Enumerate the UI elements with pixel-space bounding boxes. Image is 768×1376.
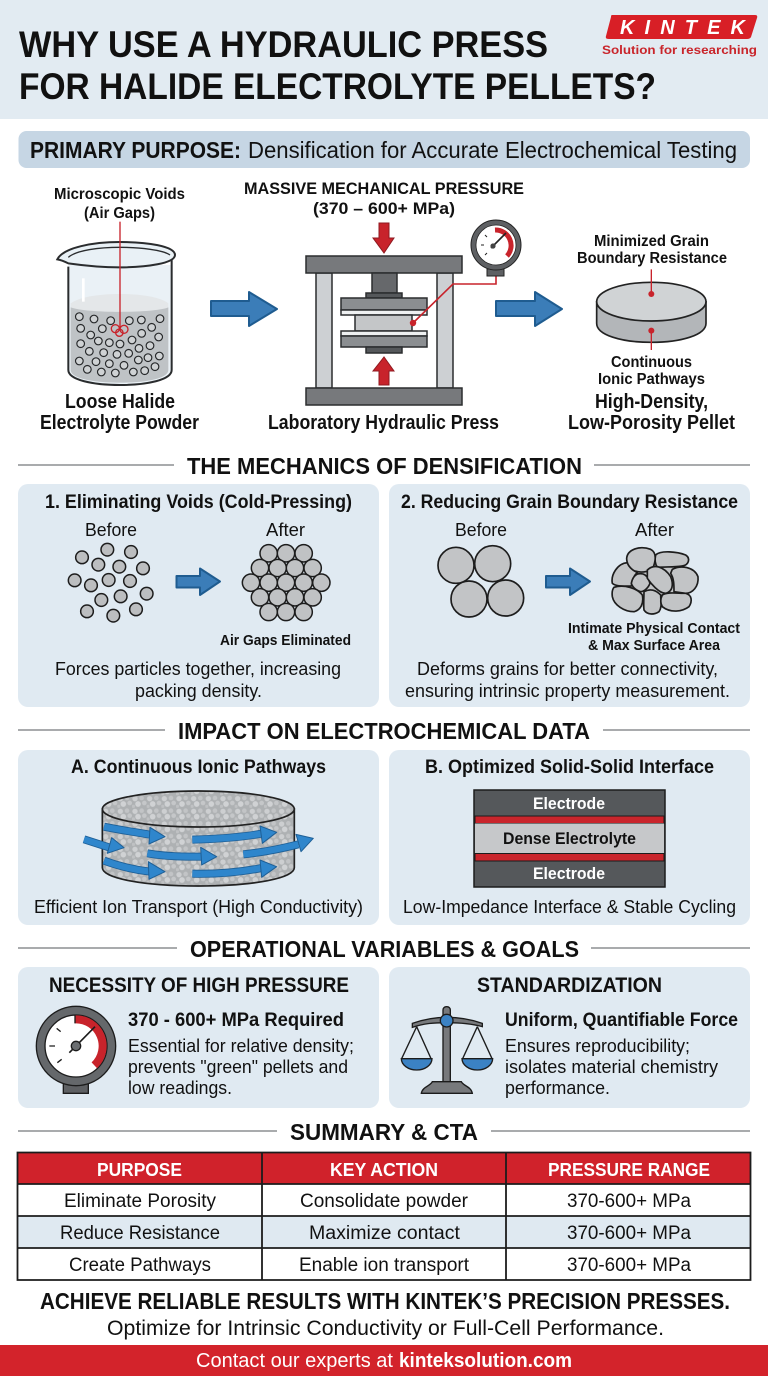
label: continuous ionic pathways: Continuous bbox=[611, 354, 692, 371]
label: continuous ionic pathways: Ionic Pathways bbox=[598, 371, 705, 388]
panel: reducing grain boundary resistance bbox=[389, 484, 750, 707]
label: microscopic voids: (Air Gaps) bbox=[84, 205, 155, 222]
description: Low-Impedance Interface & Stable Cycling bbox=[403, 897, 736, 917]
logo: Kintek bbox=[602, 15, 757, 57]
label: microscopic voids bbox=[54, 186, 185, 222]
table row 2: Maximize contact bbox=[309, 1223, 461, 1244]
label: massive mechanical pressure: (370 – 600+ MPa) bbox=[313, 199, 455, 218]
panel: pellet bbox=[568, 233, 735, 434]
label: after: After bbox=[635, 520, 674, 540]
diagram: deformed grains bbox=[612, 548, 698, 614]
footer contact bar: Contact our experts at bbox=[196, 1350, 393, 1372]
label: high density pellet: High-Density, bbox=[595, 391, 708, 413]
label: dense electrolyte: Dense Electrolyte bbox=[503, 829, 636, 848]
description: prevents "green" pellets and bbox=[128, 1057, 348, 1077]
label: intimate physical contact: & Max Surface Area bbox=[588, 638, 721, 654]
table header: PURPOSE bbox=[97, 1159, 182, 1180]
diagram: packed particles bbox=[242, 545, 330, 621]
panel heading: 2. Reducing Grain Boundary Resistance bbox=[401, 492, 738, 513]
label: high density pellet: Low-Porosity Pellet bbox=[568, 412, 735, 434]
table header: PRESSURE RANGE bbox=[548, 1159, 710, 1180]
logo: Kintek: KINTEK bbox=[620, 17, 747, 39]
panel: hydraulic press bbox=[244, 179, 524, 405]
panel: necessity of high pressure bbox=[18, 967, 379, 1108]
icon: balance scales bbox=[401, 1007, 493, 1093]
label: minimized grain boundary resistance: Minimized Grain bbox=[594, 233, 709, 250]
table row 3: Enable ion transport bbox=[299, 1255, 470, 1276]
callout: pressure required: 370 - 600+ MPa Required bbox=[128, 1009, 344, 1031]
header band bbox=[0, 0, 768, 119]
call to action: Optimize for Intrinsic Conductivity or Full-Cell Performance. bbox=[107, 1317, 664, 1340]
panel heading: B. Optimized Solid-Solid Interface bbox=[425, 757, 714, 778]
label: minimized grain boundary resistance: Boundary Resistance bbox=[577, 250, 727, 267]
description: Ensures reproducibility; bbox=[505, 1036, 690, 1056]
arrow: pressing up bbox=[373, 357, 394, 385]
description: packing density. bbox=[135, 681, 262, 701]
logo: Kintek: Solution for researching bbox=[602, 45, 757, 57]
arrow bbox=[546, 568, 590, 595]
description bbox=[505, 1036, 718, 1098]
callout: uniform force: Uniform, Quantifiable Force bbox=[505, 1009, 738, 1031]
table row 1: 370-600+ MPa bbox=[567, 1191, 691, 1212]
label: high density pellet bbox=[568, 391, 735, 434]
icon: small pressure gauge bbox=[471, 220, 521, 276]
table row 1: Consolidate powder bbox=[300, 1191, 469, 1212]
description: Forces particles together, increasing bbox=[55, 659, 341, 679]
description bbox=[55, 659, 341, 701]
table header bbox=[97, 1159, 710, 1180]
table row 1 bbox=[64, 1191, 691, 1212]
footer contact bar: kinteksolution.com bbox=[399, 1350, 572, 1372]
label: loose halide powder bbox=[40, 391, 199, 434]
diagram: loose particles bbox=[68, 543, 153, 622]
icon: pressure gauge bbox=[36, 1006, 116, 1093]
table row 2: 370-600+ MPa bbox=[567, 1223, 691, 1244]
label: continuous ionic pathways bbox=[598, 354, 705, 388]
panel: standardization bbox=[389, 967, 750, 1108]
panel heading: STANDARDIZATION bbox=[477, 974, 662, 997]
heading: impact on electrochemical data: IMPACT ON ELECTROCHEMICAL DATA bbox=[178, 718, 590, 744]
label: microscopic voids: Microscopic Voids bbox=[54, 186, 185, 203]
label: after: After bbox=[266, 520, 305, 540]
description: Deforms grains for better connectivity, bbox=[417, 659, 718, 679]
table row 3: 370-600+ MPa bbox=[567, 1255, 691, 1276]
primary purpose banner bbox=[18, 131, 750, 168]
label: intimate physical contact: Intimate Physical Contact bbox=[568, 621, 740, 637]
icon: beaker with powder bbox=[57, 222, 175, 385]
panel: optimized solid-solid interface bbox=[389, 750, 750, 925]
description: isolates material chemistry bbox=[505, 1057, 718, 1077]
icon: press frame bbox=[306, 256, 462, 405]
label: massive mechanical pressure bbox=[244, 179, 524, 218]
label: before: Before bbox=[455, 520, 507, 540]
gauge connector line bbox=[413, 276, 496, 323]
label: top electrode: Electrode bbox=[533, 794, 605, 813]
heading: mechanics of densification: THE MECHANICS OF DENSIFICATION bbox=[187, 453, 582, 479]
table row 2: Reduce Resistance bbox=[60, 1223, 220, 1244]
heading: summary and cta: SUMMARY & CTA bbox=[290, 1119, 478, 1145]
call to action bbox=[40, 1288, 730, 1340]
label: intimate physical contact bbox=[568, 621, 740, 654]
arrow: press to pellet bbox=[496, 292, 562, 326]
diagram: cylinder with ion arrows bbox=[84, 791, 313, 886]
description: ensuring intrinsic property measurement. bbox=[405, 681, 730, 701]
diagram: layer stack bbox=[474, 790, 665, 887]
panel heading: 1. Eliminating Voids (Cold-Pressing) bbox=[45, 492, 352, 513]
primary purpose banner: PRIMARY PURPOSE: bbox=[30, 137, 241, 163]
panel heading: NECESSITY OF HIGH PRESSURE bbox=[49, 974, 349, 997]
heading: operational variables and goals: OPERATIONAL VARIABLES & GOALS bbox=[190, 936, 579, 962]
title: WHY USE A HYDRAULIC PRESS bbox=[19, 24, 548, 65]
label: loose halide powder: Loose Halide bbox=[65, 391, 175, 413]
summary table bbox=[18, 1152, 750, 1280]
label: air gaps eliminated: Air Gaps Eliminated bbox=[220, 633, 351, 649]
description bbox=[405, 659, 730, 701]
primary purpose banner: Densification for Accurate Electrochemical Testing bbox=[248, 137, 737, 163]
panel: continuous ionic pathways bbox=[18, 750, 379, 925]
label: loose halide powder: Electrolyte Powder bbox=[40, 412, 199, 434]
table header: KEY ACTION bbox=[330, 1159, 438, 1180]
icon: pellet disc bbox=[597, 269, 706, 350]
label: bottom electrode: Electrode bbox=[533, 864, 605, 883]
title: FOR HALIDE ELECTROLYTE PELLETS? bbox=[19, 66, 656, 107]
sample point bbox=[410, 320, 416, 326]
label: minimized grain boundary resistance bbox=[577, 233, 727, 267]
arrow bbox=[176, 568, 220, 595]
description bbox=[128, 1036, 354, 1098]
panel heading: A. Continuous Ionic Pathways bbox=[71, 757, 326, 778]
diagram: round grains bbox=[438, 546, 524, 617]
footer contact bar bbox=[0, 1345, 768, 1376]
label: before: Before bbox=[85, 520, 137, 540]
table row 3: Create Pathways bbox=[69, 1255, 211, 1276]
table row 1: Eliminate Porosity bbox=[64, 1191, 216, 1212]
arrow: pressing down bbox=[373, 223, 394, 253]
description: low readings. bbox=[128, 1078, 232, 1098]
panel: eliminating voids bbox=[18, 484, 379, 707]
table row 2 bbox=[60, 1223, 691, 1244]
label: massive mechanical pressure: MASSIVE MECHANICAL PRESSURE bbox=[244, 179, 524, 198]
description: Efficient Ion Transport (High Conductivity) bbox=[34, 897, 363, 917]
description: Essential for relative density; bbox=[128, 1036, 354, 1056]
label: laboratory hydraulic press: Laboratory Hydraulic Press bbox=[268, 412, 499, 434]
panel: powder beaker bbox=[40, 186, 199, 434]
description: performance. bbox=[505, 1078, 610, 1098]
arrow: powder to press bbox=[211, 292, 277, 326]
title bbox=[19, 24, 656, 107]
table row 3 bbox=[69, 1255, 691, 1276]
